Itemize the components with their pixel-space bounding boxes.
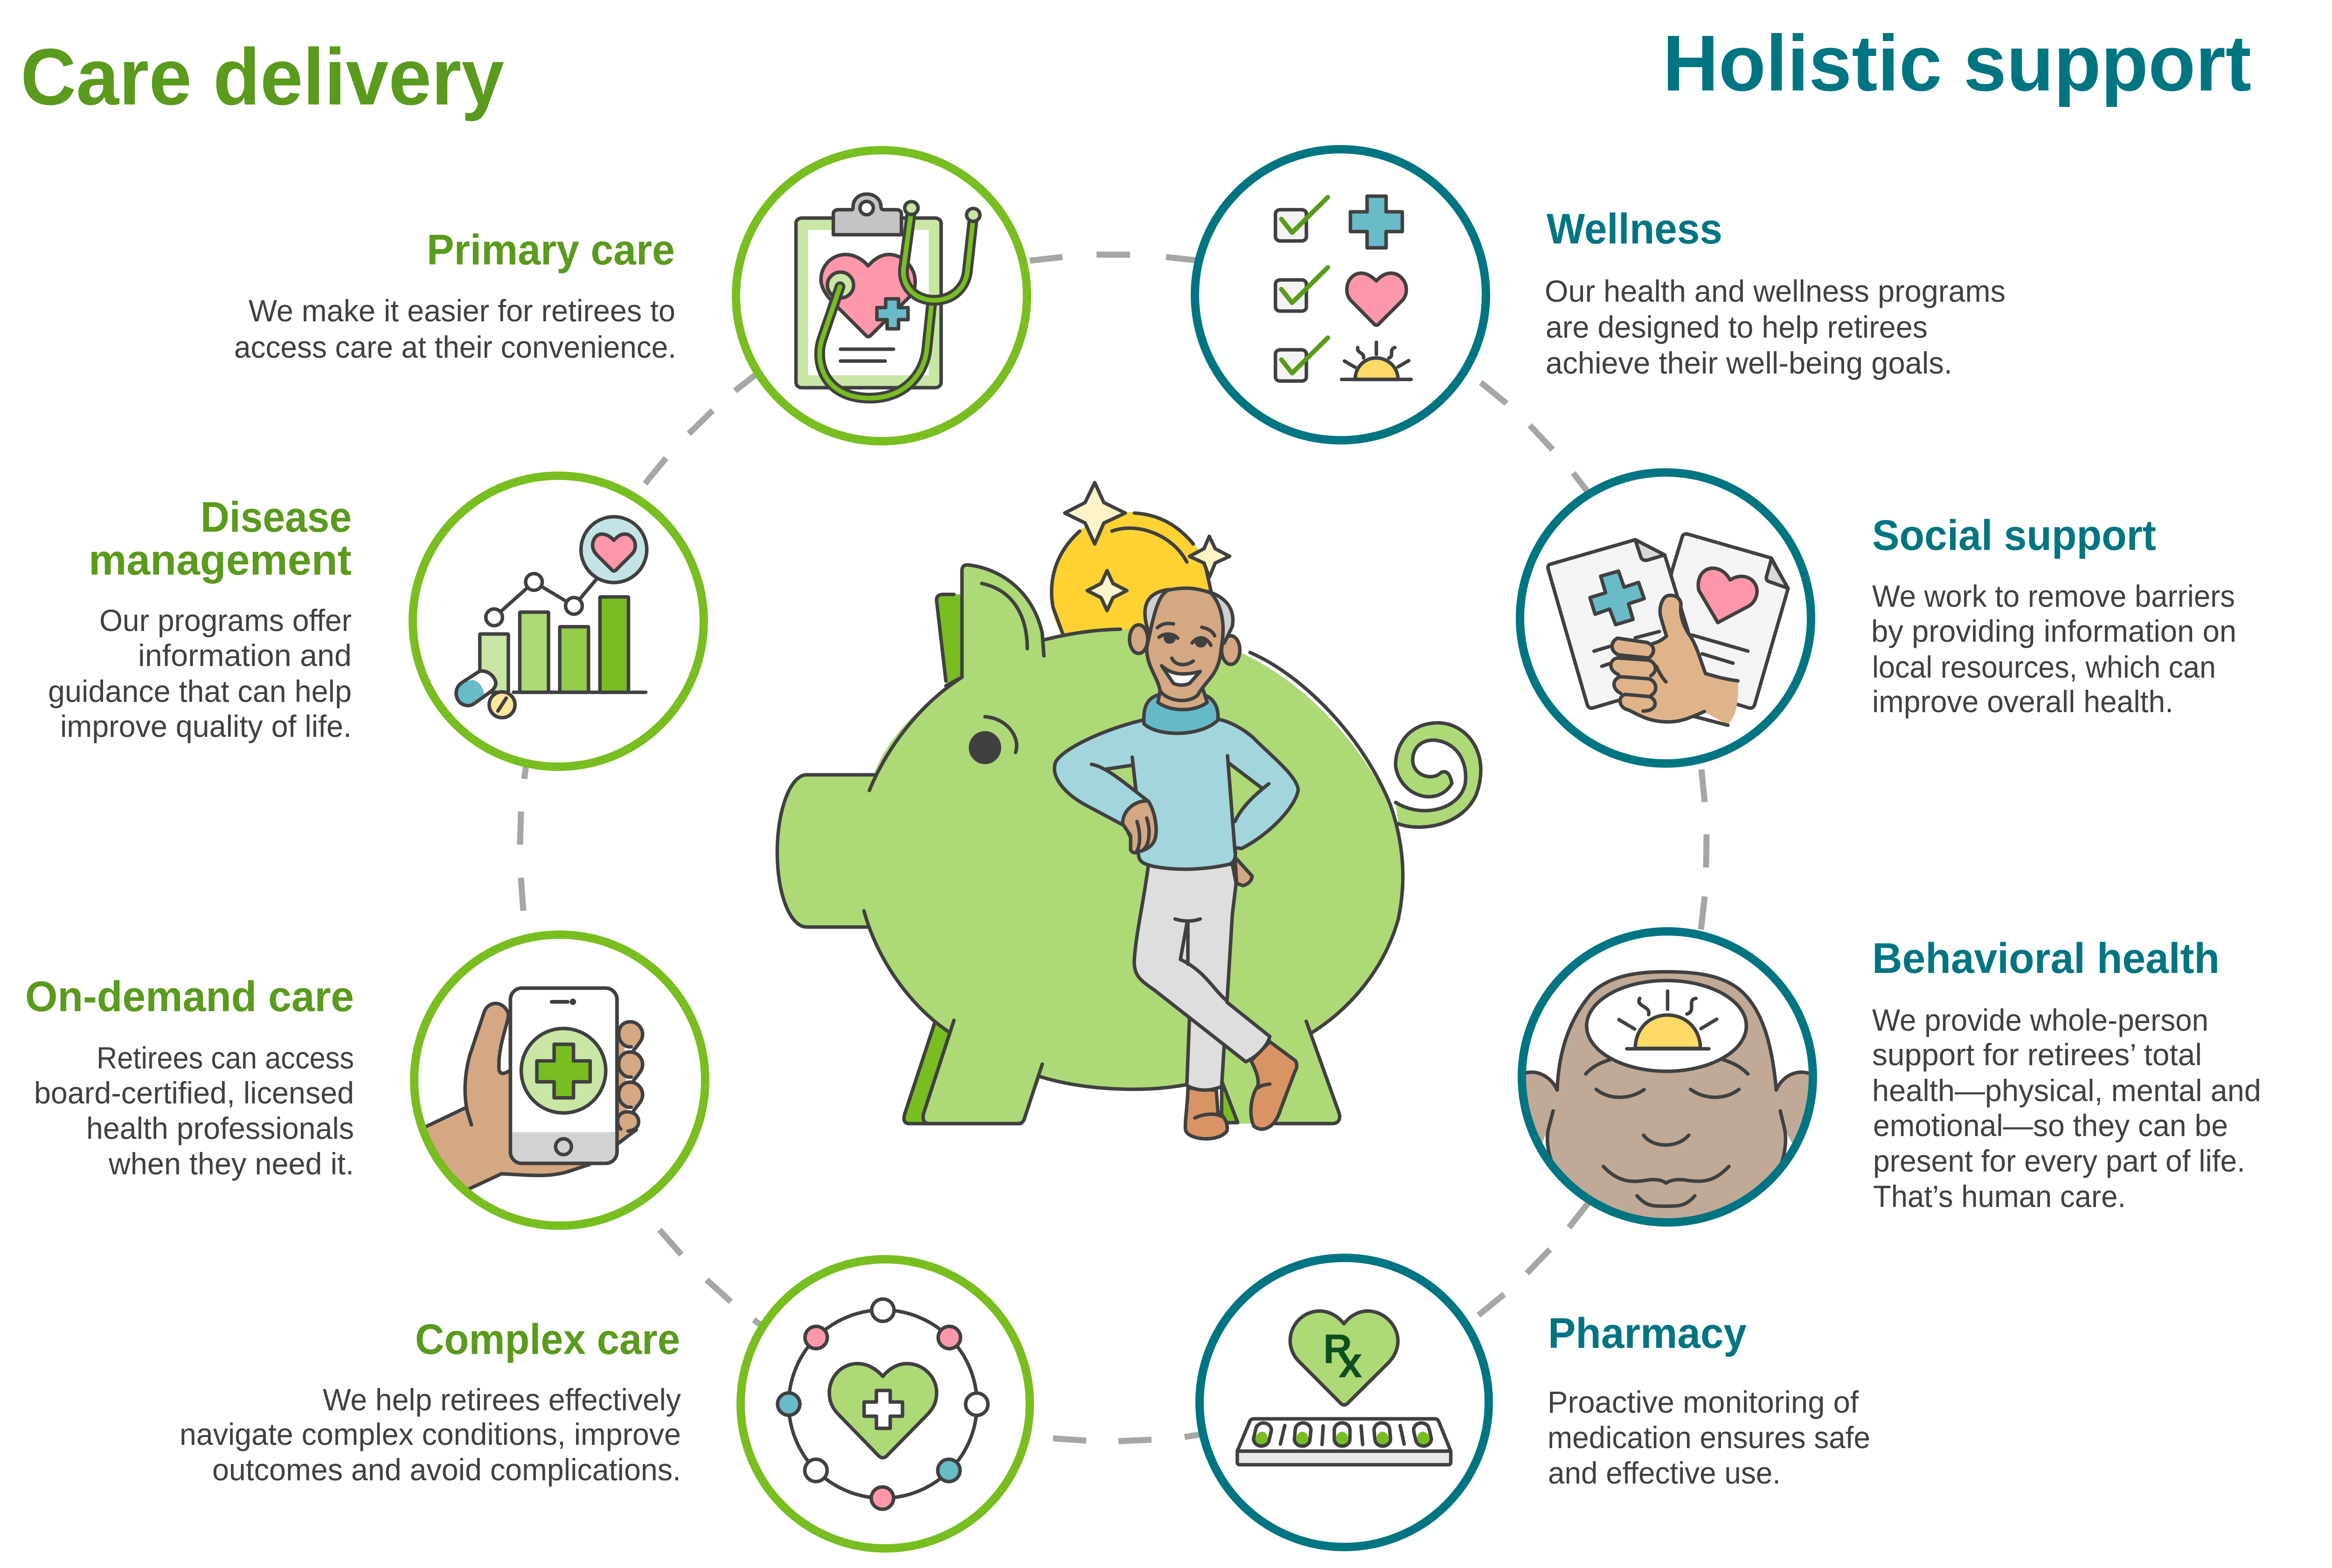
text block: pharmacy description: Proactive monitoring of (1548, 1385, 1859, 1419)
text block: on-demand care description: board-certified, licensed (34, 1075, 354, 1110)
text block: disease management description: information and (138, 638, 352, 673)
man (1055, 588, 1298, 1139)
text block: on-demand care description: Retirees can access (97, 1041, 354, 1075)
text block: pharmacy description: medication ensures safe (1548, 1420, 1870, 1455)
panel: behavioral health text (1872, 935, 2261, 1214)
icon: complex care heart with orbit (741, 1259, 1030, 1548)
panel: social support text (1871, 512, 2236, 719)
panel: on-demand care text (25, 973, 354, 1181)
icon: primary care clipboard and stethoscope (736, 150, 1027, 441)
heading: Disease management: management (89, 536, 352, 584)
text block: complex care description: outcomes and avoid complications. (212, 1452, 681, 1487)
heading: On-demand care: On-demand care (25, 973, 354, 1020)
heading: Complex care: Complex care (415, 1316, 680, 1363)
text block: social support description (1871, 579, 2236, 719)
heading: Behavioral health: Behavioral health (1872, 935, 2220, 982)
text block: disease management description: Our programs offer (99, 603, 352, 638)
coin and sparkles (1050, 483, 1230, 674)
heading: Wellness: Wellness (1547, 205, 1722, 253)
text block: wellness description: are designed to help retirees (1546, 310, 1928, 344)
heading: Disease management (89, 493, 352, 584)
text block: pharmacy description: and effective use. (1548, 1456, 1781, 1490)
text block: behavioral health description: present for every part of life. (1873, 1144, 2245, 1178)
text block: complex care description: navigate complex conditions, improve (180, 1417, 681, 1451)
illustration: piggy bank with man leaning (777, 483, 1481, 1139)
text block: wellness description: achieve their well-being goals. (1546, 346, 1952, 380)
text block: disease management description: improve quality of life. (60, 709, 352, 743)
text block: primary care description: access care at their convenience. (234, 330, 676, 364)
text block: pharmacy description (1548, 1385, 1870, 1490)
text block: complex care description (180, 1382, 681, 1487)
text block: behavioral health description: That’s human care. (1873, 1179, 2126, 1214)
text block: complex care description: We help retirees effectively (323, 1382, 681, 1417)
piggy bank (777, 565, 1481, 1124)
text block: disease management description (48, 603, 352, 743)
text block: social support description: We work to remove barriers (1872, 579, 2235, 613)
text block: wellness description: Our health and wellness programs (1545, 274, 2006, 308)
text block: behavioral health description (1872, 1003, 2261, 1214)
icon: wellness checklist (1195, 149, 1486, 440)
panel: primary care text (234, 226, 676, 364)
panel: disease management text (48, 493, 352, 743)
text block: disease management description: guidance that can help (48, 674, 352, 708)
text block: behavioral health description: support for retirees’ total (1872, 1037, 2202, 1072)
heading: Disease management: Disease (201, 493, 352, 541)
text block: behavioral health description: emotional—so they can be (1873, 1108, 2228, 1143)
icon: social support papers and thumbs up (1520, 472, 1811, 763)
text block: on-demand care description: when they need it. (108, 1146, 354, 1181)
text block: wellness description (1545, 274, 2006, 380)
panel: wellness text (1545, 205, 2006, 380)
icon: behavioral health face with sun (1515, 931, 1818, 1236)
panel: pharmacy text (1548, 1310, 1870, 1490)
heading: Social support: Social support (1872, 512, 2156, 559)
text block: primary care description: We make it easier for retirees to (249, 293, 675, 328)
text block: social support description: improve overall health. (1872, 684, 2173, 719)
text block: primary care description (234, 293, 676, 364)
heading: Primary care: Primary care (427, 226, 675, 274)
title: Holistic support: Holistic support (1663, 19, 2251, 108)
icon: on-demand care phone in hand (414, 935, 705, 1226)
text block: on-demand care description (34, 1041, 354, 1181)
title: Care delivery: Care delivery (21, 32, 504, 122)
text block: behavioral health description: We provide whole-person (1872, 1003, 2208, 1037)
icon: pharmacy heart and pill organizer (1200, 1258, 1489, 1547)
heading: Pharmacy: Pharmacy (1548, 1310, 1747, 1357)
text block: behavioral health description: health—physical, mental and (1872, 1073, 2261, 1108)
panel: complex care text (180, 1316, 681, 1487)
text block: on-demand care description: health professionals (86, 1111, 354, 1145)
icon: pharmacy heart and pill organizer: R (1323, 1325, 1352, 1372)
icon: pharmacy heart and pill organizer: x (1339, 1338, 1362, 1387)
icon: disease management bar chart (413, 476, 704, 767)
text block: social support description: local resources, which can (1872, 650, 2216, 684)
text block: social support description: by providing information on (1871, 614, 2236, 648)
